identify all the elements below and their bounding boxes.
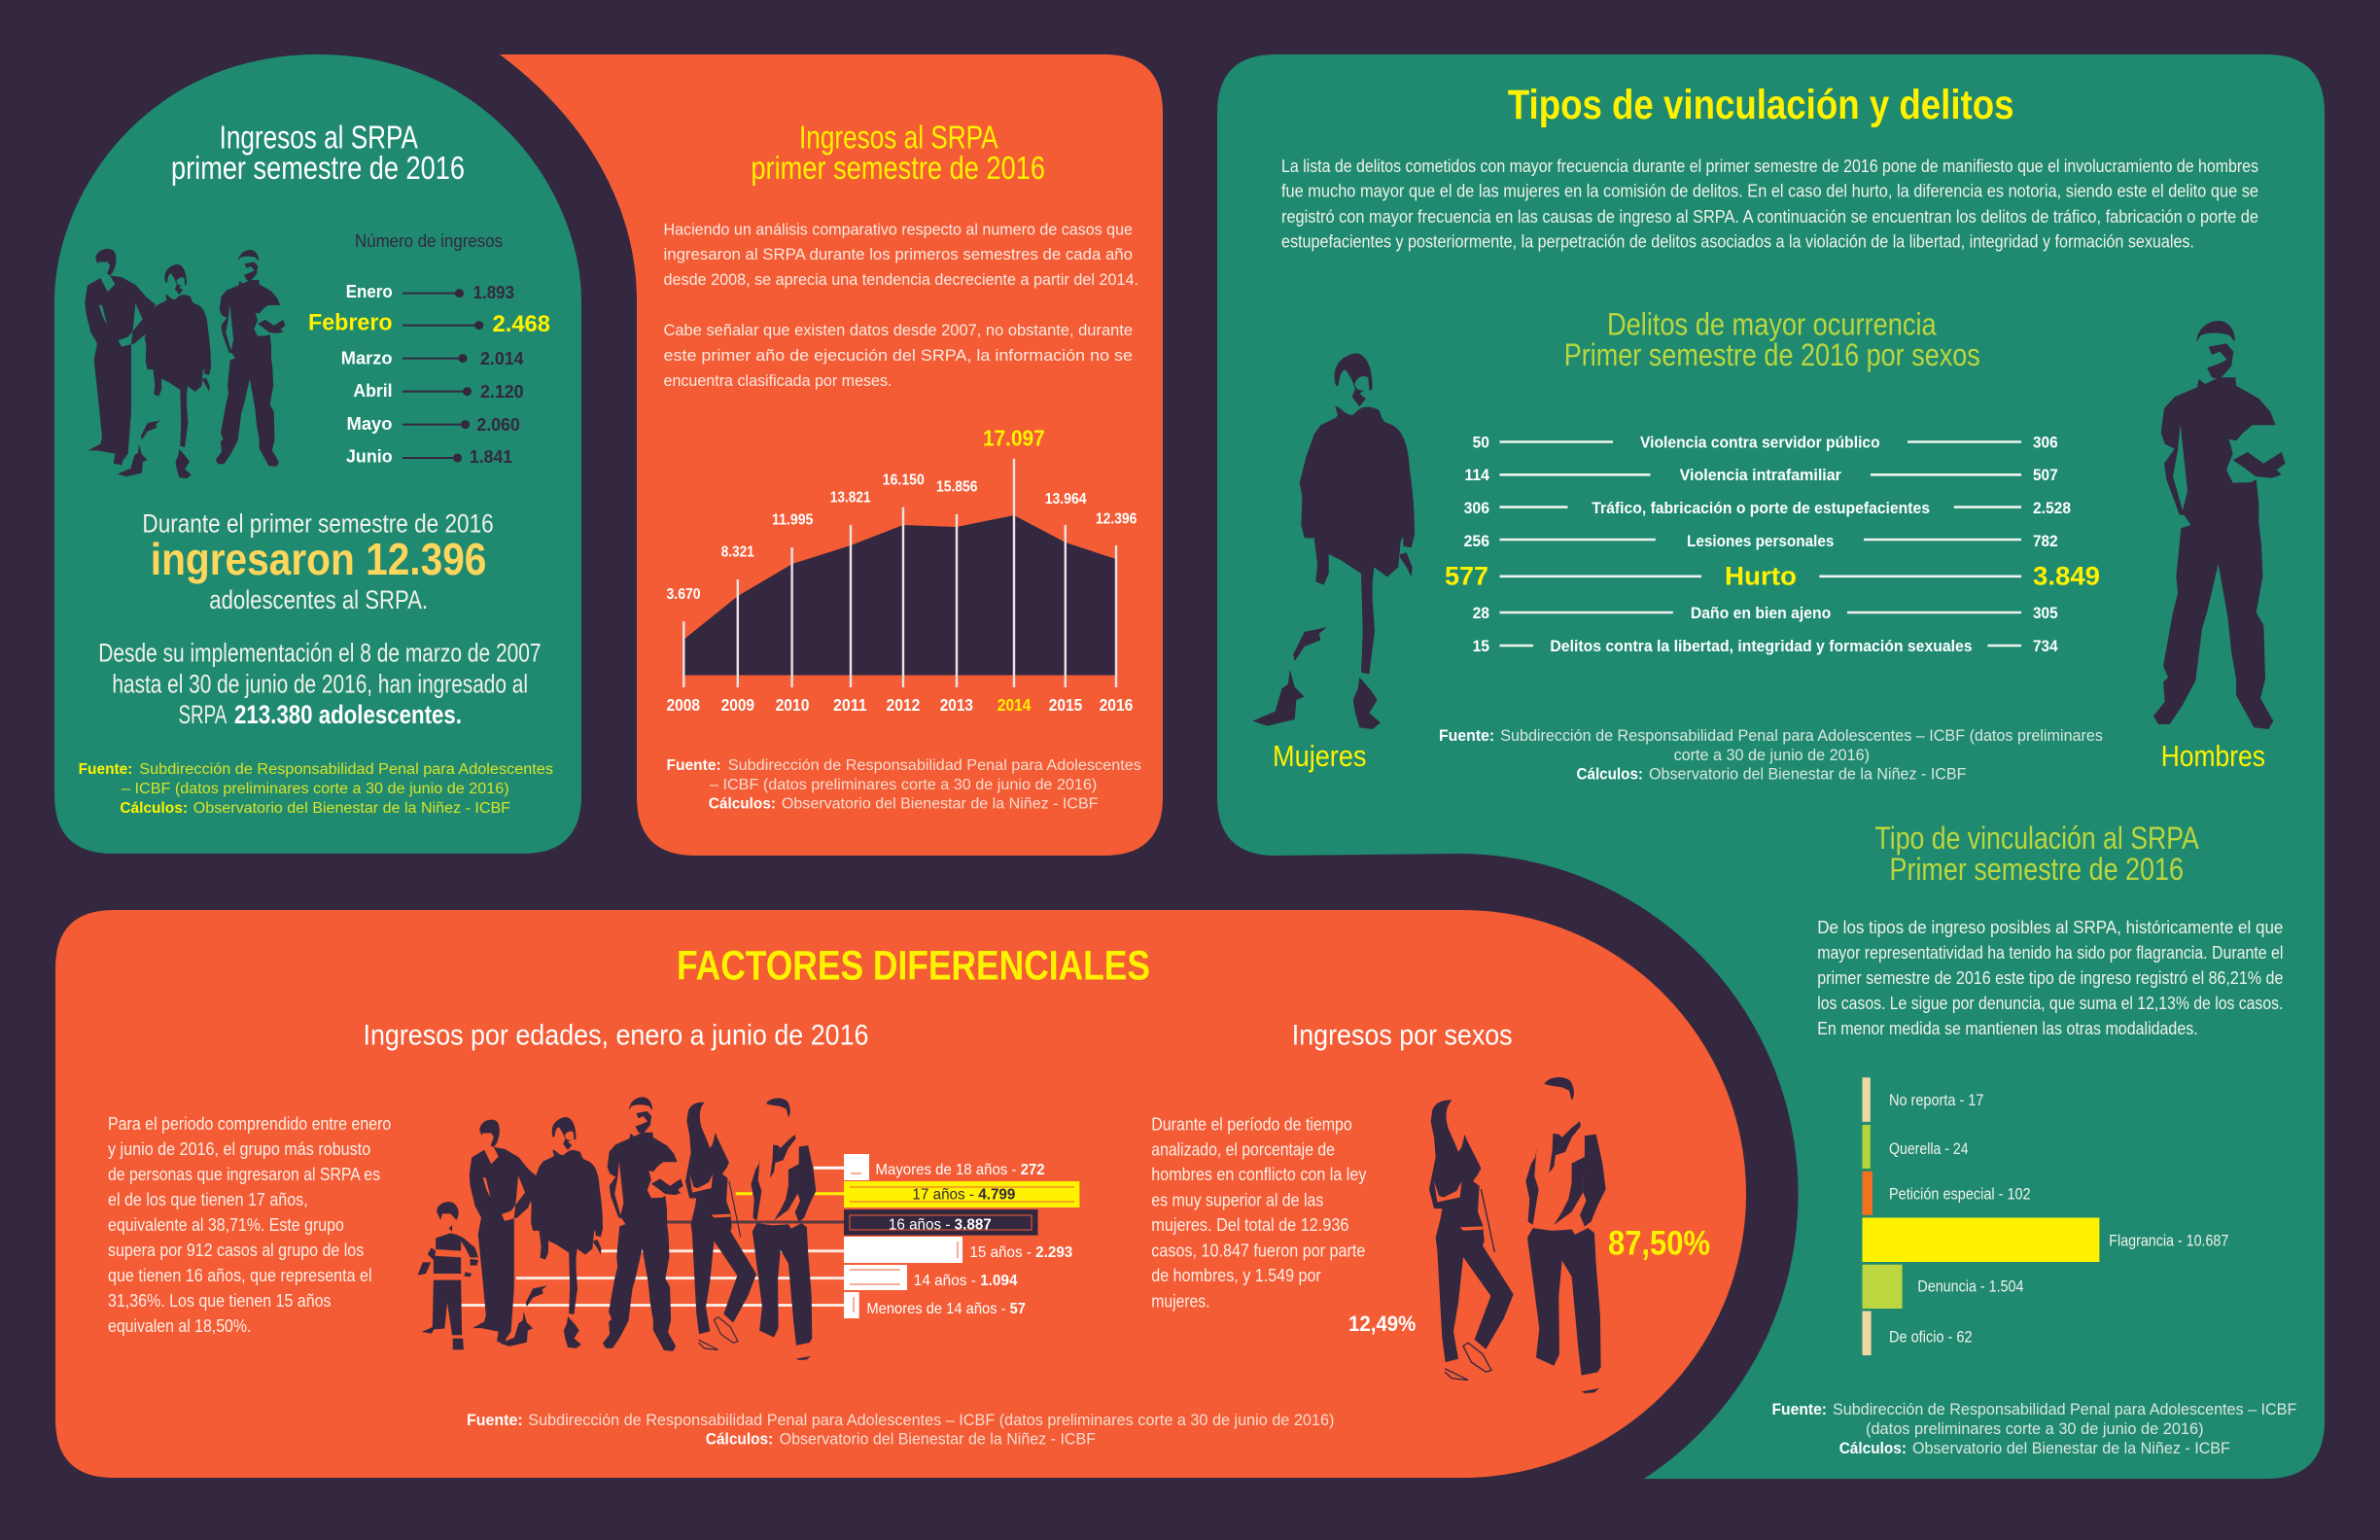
source note: Subdirección de Responsabilidad Penal para Adolescentes – ICBF — [1833, 1400, 2296, 1418]
text block: sexos: de hombres, y 1.549 por — [1151, 1266, 1321, 1285]
source note: (datos preliminares corte a 30 de junio de 2016) — [1866, 1419, 2204, 1438]
bar chart: ingresos por edades: 17 años - 4.799 — [912, 1186, 1015, 1204]
text block: sexos: es muy superior al de las — [1151, 1190, 1323, 1209]
area chart: yearly admissions — [667, 426, 1138, 715]
source note: Observatorio del Bienestar de la Niñez - ICBF — [193, 800, 510, 817]
source note — [79, 761, 553, 817]
chart label: Número de ingresos — [355, 231, 503, 251]
diverging chart: offences by sex: 2.528 — [2033, 500, 2071, 517]
diverging chart: offences by sex: 306 — [1464, 500, 1489, 517]
text block: tipos de ingreso: De los tipos de ingreso posibles al SRPA, históricamente el que — [1817, 917, 2283, 937]
heading: Ingresos al SRPA — [799, 119, 998, 156]
text block: edades: de personas que ingresaron al SRPA es — [108, 1165, 380, 1184]
stat: mujeres: 12,49% — [1348, 1312, 1416, 1336]
bar chart: tipo de vinculación: Querella - 24 — [1889, 1139, 1969, 1158]
text block: sexos: Durante el período de tiempo — [1151, 1114, 1352, 1134]
area chart: yearly admissions: 3.670 — [667, 586, 701, 603]
diverging chart: offences by sex: Violencia contra servidor público — [1640, 434, 1880, 451]
source note — [667, 757, 1141, 813]
text block: analysis — [663, 220, 1138, 390]
label: Hombres: Hombres — [2161, 739, 2265, 773]
illustration: group of teens and child — [418, 1097, 816, 1360]
lollipop chart: monthly admissions: 2.120 — [480, 382, 524, 402]
diverging chart: offences by sex — [1445, 434, 2100, 655]
subheading: tipo de vinculación: Primer semestre de 2016 — [1890, 852, 2184, 887]
bar chart: tipo de vinculación: No reporta - 17 — [1889, 1091, 1983, 1109]
heading: Tipos de vinculación y delitos — [1508, 82, 2014, 128]
text block: edades: el de los que tienen 17 años, — [108, 1190, 308, 1209]
source note: Observatorio del Bienestar de la Niñez - ICBF — [1649, 765, 1966, 784]
text block: sexos: mujeres. — [1151, 1291, 1209, 1311]
bar chart: tipo de vinculación — [1863, 1077, 2228, 1355]
area chart: yearly admissions: 16.150 — [883, 472, 925, 489]
subheading: tipo de vinculación: Tipo de vinculación al SRPA — [1874, 821, 2199, 856]
key stat: 12.396: ingresaron 12.396 — [151, 534, 486, 584]
area chart: yearly admissions: 12.396 — [1096, 511, 1138, 528]
lollipop chart: monthly admissions: 2.014 — [480, 349, 524, 368]
source note: Cálculos: — [1839, 1439, 1907, 1457]
heading — [171, 119, 465, 186]
lollipop chart: monthly admissions: 2.060 — [476, 415, 520, 435]
source note: Subdirección de Responsabilidad Penal para Adolescentes — [728, 757, 1141, 774]
lollipop chart: monthly admissions: Abril — [353, 381, 393, 401]
bar chart: tipo de vinculación: Petición especial - 102 — [1889, 1185, 2031, 1204]
text block: tipos de ingreso: mayor representatividad ha tenido ha sido por flagrancia. Durante el — [1817, 942, 2283, 962]
text block: total since 2007: Desde su implementación el 8 de marzo de 2007 — [98, 639, 542, 668]
bar chart: ingresos por edades — [460, 1154, 1079, 1318]
diverging chart: offences by sex: Lesiones personales — [1687, 533, 1834, 550]
area chart: yearly admissions: 8.321 — [721, 544, 754, 561]
area chart: yearly admissions: 2014 — [998, 695, 1032, 715]
panel shape — [500, 54, 1163, 856]
area chart: yearly admissions: 2008 — [667, 695, 700, 715]
diverging chart: offences by sex: 306 — [2033, 434, 2058, 451]
diverging chart: offences by sex: Hurto — [1725, 562, 1797, 591]
source note: Fuente: — [79, 761, 132, 778]
source note: corte a 30 de junio de 2016) — [1674, 746, 1870, 764]
diverging chart: offences by sex: Violencia intrafamiliar — [1680, 467, 1841, 484]
diverging chart: offences by sex: 114 — [1464, 467, 1490, 484]
text block: edades: supera por 912 casos al grupo de los — [108, 1241, 364, 1260]
panel shape — [54, 54, 581, 854]
text block: analysis: Cabe señalar que existen datos desde 2007, no obstante, durante — [663, 321, 1133, 339]
text block: edades — [108, 1114, 391, 1336]
heading: primer semestre de 2016 — [751, 150, 1045, 186]
source note: Subdirección de Responsabilidad Penal para Adolescentes – ICBF (datos preliminares corte a 30 de junio de 2016) — [528, 1411, 1334, 1429]
lollipop chart: monthly admissions: 2.468 — [492, 311, 550, 337]
source note: Observatorio del Bienestar de la Niñez - ICBF — [780, 1430, 1096, 1449]
lollipop chart: monthly admissions: Junio — [346, 447, 393, 467]
text block: intro — [1281, 156, 2258, 251]
illustration: three teens — [85, 249, 285, 478]
heading: Ingresos al SRPA — [220, 119, 418, 156]
diverging chart: offences by sex: 256 — [1464, 533, 1489, 550]
text block: analysis: ingresaron al SRPA durante los primeros semestres de cada año — [663, 245, 1133, 263]
bar chart: ingresos por edades: Mayores de 18 años - 272 — [875, 1162, 1045, 1178]
illustration: girl and boy — [1429, 1077, 1606, 1393]
diverging chart: offences by sex: 507 — [2033, 467, 2058, 484]
key stat: 12.396: adolescentes al SRPA. — [209, 585, 428, 614]
text block: analysis: este primer año de ejecución del SRPA, la información no se — [663, 346, 1133, 365]
source note: Fuente: — [1439, 726, 1494, 745]
lollipop chart: monthly admissions: Febrero — [308, 309, 393, 336]
area chart: yearly admissions: 2010 — [776, 695, 810, 715]
panel shape — [55, 910, 1746, 1478]
area chart: yearly admissions: 13.964 — [1045, 491, 1087, 508]
panel shape — [1217, 54, 2325, 1479]
area chart: yearly admissions: 2012 — [887, 695, 921, 715]
source note: Fuente: — [467, 1411, 523, 1429]
heading: FACTORES DIFERENCIALES — [677, 943, 1150, 990]
key stat: 12.396 — [142, 508, 494, 614]
source note: Cálculos: — [706, 1430, 773, 1449]
text block: analysis: encuentra clasificada por meses. — [663, 371, 892, 390]
text block: total since 2007: hasta el 30 de junio de 2016, han ingresado al — [112, 669, 528, 698]
source note: Cálculos: — [709, 796, 776, 813]
panel: historic trend (orange) — [500, 54, 1163, 856]
text block: sexos: mujeres. Del total de 12.936 — [1151, 1215, 1348, 1235]
text block: edades: que tienen 16 años, que representa el — [108, 1266, 372, 1285]
source note — [1439, 726, 2103, 784]
diverging chart: offences by sex: 3.849 — [2033, 562, 2100, 591]
bar chart: tipo de vinculación: Flagrancia - 10.687 — [2109, 1231, 2228, 1249]
lollipop chart: monthly admissions: Mayo — [346, 414, 393, 434]
bar chart: ingresos por edades: 15 años - 2.293 — [969, 1244, 1072, 1261]
illustration: girl silhouette — [1252, 353, 1415, 729]
area chart: yearly admissions: 2013 — [940, 695, 973, 715]
text block: tipos de ingreso: los casos. Le sigue por denuncia, que suma el 12,13% de los casos. — [1817, 993, 2283, 1013]
area chart: yearly admissions: 2016 — [1100, 695, 1134, 715]
diverging chart: offences by sex: 28 — [1473, 605, 1489, 622]
diverging chart: offences by sex: Tráfico, fabricación o porte de estupefacientes — [1592, 500, 1930, 517]
panel: factores diferenciales (orange) — [55, 910, 1746, 1478]
area chart: yearly admissions: 13.821 — [830, 490, 871, 507]
text block: intro: estupefacientes y posteriormente, la perpetración de delitos asociados a la violación de la libertad, integridad y formación sexuales. — [1281, 231, 2194, 251]
area chart: yearly admissions: 2015 — [1049, 695, 1082, 715]
lollipop chart: monthly admissions — [308, 282, 550, 467]
text block: sexos — [1151, 1114, 1366, 1311]
source note: Cálculos: — [120, 800, 188, 817]
panel: tipos de vinculación y delitos (green) — [1217, 54, 2325, 1479]
diverging chart: offences by sex: 782 — [2033, 533, 2058, 550]
subheading: edades: Ingresos por edades, enero a junio de 2016 — [364, 1020, 869, 1052]
text block: tipos de ingreso: En menor medida se mantienen las otras modalidades. — [1817, 1018, 2198, 1038]
stat: hombres: 87,50% — [1608, 1224, 1710, 1262]
panel: ingresos monthly (green arch) — [54, 54, 581, 854]
text block: sexos: analizado, el porcentaje de — [1151, 1139, 1335, 1159]
label: Mujeres: Mujeres — [1273, 739, 1367, 773]
area chart: yearly admissions: 17.097 — [983, 426, 1045, 451]
text block: intro: fue mucho mayor que el de las mujeres en la comisión de delitos. En el caso del hurto, la diferencia es notoria, siendo este el delito que se — [1281, 181, 2258, 201]
subheading: tipo de vinculación — [1874, 821, 2199, 887]
bar chart: ingresos por edades: 16 años - 3.887 — [889, 1217, 992, 1233]
source note: Observatorio del Bienestar de la Niñez - ICBF — [782, 796, 1099, 813]
source note: – ICBF (datos preliminares corte a 30 de junio de 2016) — [122, 781, 509, 797]
bar chart: ingresos por edades: Menores de 14 años - 57 — [866, 1301, 1026, 1317]
text block: total since 2007: 213.380 adolescentes. — [234, 700, 462, 729]
source note: Cálculos: — [1577, 765, 1643, 784]
text block: sexos: hombres en conflicto con la ley — [1151, 1165, 1366, 1184]
text block: total since 2007 — [98, 639, 542, 729]
heading: primer semestre de 2016 — [171, 150, 465, 186]
area chart: yearly admissions: 11.995 — [772, 512, 814, 529]
text block: analysis: desde 2008, se aprecia una tendencia decreciente a partir del 2014. — [663, 270, 1138, 289]
key stat: 12.396: Durante el primer semestre de 2016 — [142, 508, 494, 538]
lollipop chart: monthly admissions: 1.841 — [470, 447, 512, 467]
text block: edades: Para el periodo comprendido entre enero — [108, 1114, 391, 1134]
lollipop chart: monthly admissions: 1.893 — [473, 283, 514, 302]
area chart: yearly admissions: 2011 — [833, 695, 867, 715]
text block: edades: equivalen al 18,50%. — [108, 1316, 251, 1336]
text block: edades: equivalente al 38,71%. Este grupo — [108, 1215, 344, 1235]
source note: Subdirección de Responsabilidad Penal para Adolescentes – ICBF (datos preliminares — [1500, 726, 2103, 745]
source note: Fuente: — [667, 757, 721, 774]
diverging chart: offences by sex: 15 — [1473, 638, 1489, 655]
source note: Observatorio del Bienestar de la Niñez - ICBF — [1912, 1439, 2230, 1457]
lollipop chart: monthly admissions: Marzo — [341, 349, 393, 368]
source note: Fuente: — [1771, 1400, 1827, 1418]
source note: Subdirección de Responsabilidad Penal para Adolescentes — [139, 761, 553, 778]
subheading: delitos: Delitos de mayor ocurrencia — [1607, 307, 1937, 342]
source note: – ICBF (datos preliminares corte a 30 de junio de 2016) — [710, 777, 1097, 793]
area chart: yearly admissions: 15.856 — [936, 479, 978, 496]
source note — [1771, 1400, 2296, 1457]
diverging chart: offences by sex: 305 — [2033, 605, 2058, 622]
diverging chart: offences by sex: 734 — [2033, 638, 2058, 655]
bar chart: ingresos por edades: 14 años - 1.094 — [914, 1273, 1018, 1289]
subheading: sexos: Ingresos por sexos — [1292, 1020, 1513, 1052]
text block: edades: y junio de 2016, el grupo más robusto — [108, 1139, 370, 1159]
bar chart: tipo de vinculación: Denuncia - 1.504 — [1917, 1277, 2024, 1295]
source note — [467, 1411, 1334, 1449]
text block: total since 2007: SRPA — [179, 700, 227, 729]
text block: edades: 31,36%. Los que tienen 15 años — [108, 1291, 331, 1311]
text block: tipos de ingreso: primer semestre de 2016 este tipo de ingreso registró el 86,21% de — [1817, 967, 2283, 988]
illustration: boy silhouette — [2153, 321, 2286, 729]
area chart: yearly admissions: 2009 — [721, 695, 754, 715]
text block: tipos de ingreso — [1817, 917, 2283, 1038]
lollipop chart: monthly admissions: Enero — [346, 282, 393, 301]
diverging chart: offences by sex: 50 — [1473, 434, 1489, 451]
text block: intro: registró con mayor frecuencia en las causas de ingreso al SRPA. A continuación se encuentran los delitos de tráfico, fabricación o porte de — [1281, 206, 2258, 227]
subheading: delitos: Primer semestre de 2016 por sexos — [1564, 337, 1980, 372]
text block: sexos: casos, 10.847 fueron por parte — [1151, 1241, 1365, 1260]
diverging chart: offences by sex: Daño en bien ajeno — [1691, 605, 1831, 622]
subheading: delitos — [1564, 307, 1980, 372]
text block: analysis: Haciendo un análisis comparativo respecto al numero de casos que — [663, 220, 1133, 238]
diverging chart: offences by sex: 577 — [1445, 562, 1488, 591]
bar chart: tipo de vinculación: De oficio - 62 — [1889, 1328, 1973, 1347]
heading — [751, 119, 1045, 186]
diverging chart: offences by sex: Delitos contra la libertad, integridad y formación sexuales — [1550, 638, 1973, 655]
